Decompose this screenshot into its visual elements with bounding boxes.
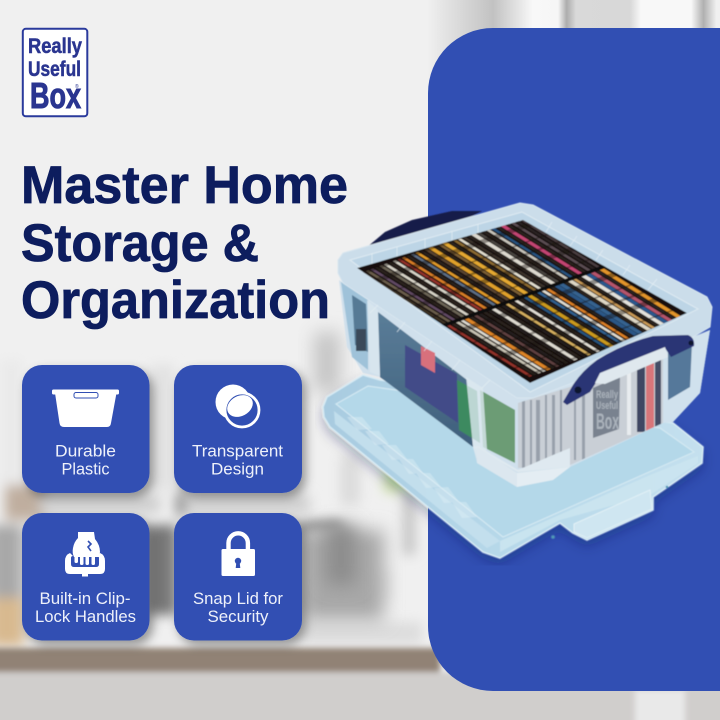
title: Master Home	[21, 156, 348, 215]
front row of DVDs	[448, 269, 684, 376]
card: built-in clip-lock handles	[22, 513, 150, 640]
card: durable plastic	[22, 365, 150, 493]
label: built-in clip-lock handles	[35, 590, 136, 626]
label: snap lid for security: Snap Lid for	[193, 590, 284, 608]
label: durable plastic: Durable	[55, 442, 116, 460]
logo: Really Useful Box: Useful	[28, 58, 81, 81]
card: snap lid for security	[174, 513, 302, 640]
logo: Really Useful Box: ®	[75, 83, 79, 90]
DVD spines seen from the end of the box	[518, 360, 663, 468]
title	[21, 156, 348, 330]
faded product label on DVD: Really	[596, 389, 619, 401]
logo: Really Useful Box: Box	[30, 75, 81, 116]
label: built-in clip-lock handles: Lock Handles	[35, 608, 136, 626]
faded product label on DVD	[593, 376, 620, 438]
panel: blue product backdrop	[428, 28, 720, 691]
icon: padlock	[222, 533, 255, 576]
label: snap lid for security	[193, 590, 284, 626]
label: transparent design: Transparent	[192, 442, 283, 460]
box rim	[338, 203, 712, 398]
label: durable plastic	[55, 442, 116, 478]
logo: Really Useful Box: Really	[28, 35, 82, 58]
box lid	[323, 375, 703, 558]
label: transparent design	[192, 442, 283, 478]
back row of DVDs	[363, 216, 598, 323]
box body	[339, 280, 710, 487]
title: Storage &	[21, 214, 259, 273]
product: clear storage box with DVDs and lid	[323, 203, 712, 558]
front handle	[563, 335, 694, 405]
label: built-in clip-lock handles: Built-in Clip-	[40, 590, 130, 608]
title: Organization	[21, 271, 330, 330]
faded product label on DVD: Useful	[596, 400, 618, 412]
gaps between DVD stacks	[444, 266, 604, 326]
icon: plastic tub	[52, 390, 119, 427]
faded product label on DVD: Box	[596, 409, 619, 434]
icon: overlapping circles	[216, 384, 259, 427]
icon: hand on clip handle	[65, 532, 105, 576]
label: snap lid for security: Security	[208, 608, 269, 626]
label: transparent design: Design	[211, 460, 264, 478]
corner pillars and base	[473, 330, 710, 487]
label: durable plastic: Plastic	[62, 460, 110, 478]
DVD cases in the box	[357, 214, 688, 383]
back handle	[366, 211, 482, 250]
logo: Really Useful Box	[23, 29, 87, 116]
cover art shading across the spines	[440, 244, 608, 348]
card: transparent design	[174, 365, 302, 493]
